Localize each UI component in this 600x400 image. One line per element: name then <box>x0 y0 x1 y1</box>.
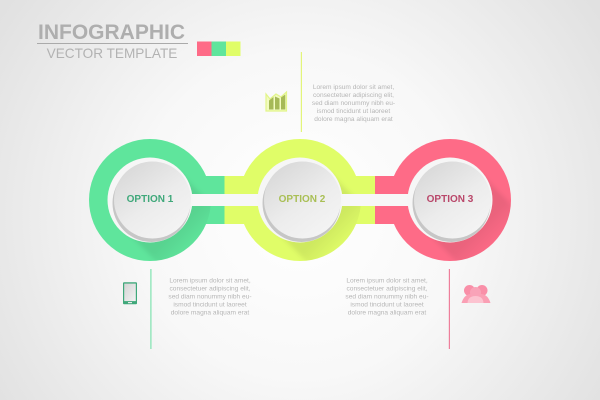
text block: option 1: Lorem ipsum dolor sit amet, <box>169 277 251 284</box>
text block: option 2: ismod tincidunt ut laoreet <box>317 108 390 115</box>
divider: option 3 <box>449 269 450 349</box>
text block: option 3: sed diam nonummy nibh eu- <box>345 293 429 300</box>
connector channel <box>150 194 450 206</box>
inner disc: option 1: OPTION 1 <box>127 194 174 205</box>
colour legend swatches <box>197 42 240 56</box>
text block: option 3 <box>345 277 429 316</box>
text block: option 3: dolore magna aliquam erat <box>348 309 426 316</box>
text block: option 2: sed diam nonummy nibh eu- <box>312 100 395 107</box>
divider: option 1 <box>150 269 152 349</box>
icon: people <box>462 285 490 303</box>
inner disc: option 1 <box>108 158 192 242</box>
text block: option 2: Lorem ipsum dolor sit amet, <box>313 84 394 91</box>
icon: mobile tablet <box>123 282 137 304</box>
text block: option 3: Lorem ipsum dolor sit amet, <box>346 277 428 284</box>
ring: option 2 <box>224 139 375 261</box>
title: VECTOR TEMPLATE <box>47 46 177 61</box>
inner disc: option 2 <box>258 158 342 242</box>
text block: option 1: sed diam nonummy nibh eu- <box>168 293 252 300</box>
ring: option 1 <box>89 139 224 261</box>
text block: option 2: dolore magna aliquam erat <box>314 116 393 123</box>
text block: option 3: consectetuer adipiscing elit, <box>346 285 428 292</box>
ring: option 3 <box>375 139 511 261</box>
divider: option 2 <box>301 52 302 132</box>
text block: option 3: ismod tincidunt ut laoreet <box>350 301 424 308</box>
title: INFOGRAPHIC <box>38 21 185 44</box>
text block: option 1 <box>168 277 252 316</box>
inner disc: option 3 <box>408 158 492 242</box>
inner disc: option 3: OPTION 3 <box>427 194 474 205</box>
text block: option 1: consectetuer adipiscing elit, <box>169 285 251 292</box>
title <box>37 21 188 61</box>
text block: option 1: ismod tincidunt ut laoreet <box>173 301 247 308</box>
icon: bar chart <box>266 92 286 111</box>
connected ring diagram <box>89 139 511 261</box>
inner disc: option 2: OPTION 2 <box>279 194 326 205</box>
text block: option 2: consectetuer adipiscing elit, <box>313 92 394 99</box>
text block: option 2 <box>312 84 395 123</box>
text block: option 1: dolore magna aliquam erat <box>171 309 249 316</box>
